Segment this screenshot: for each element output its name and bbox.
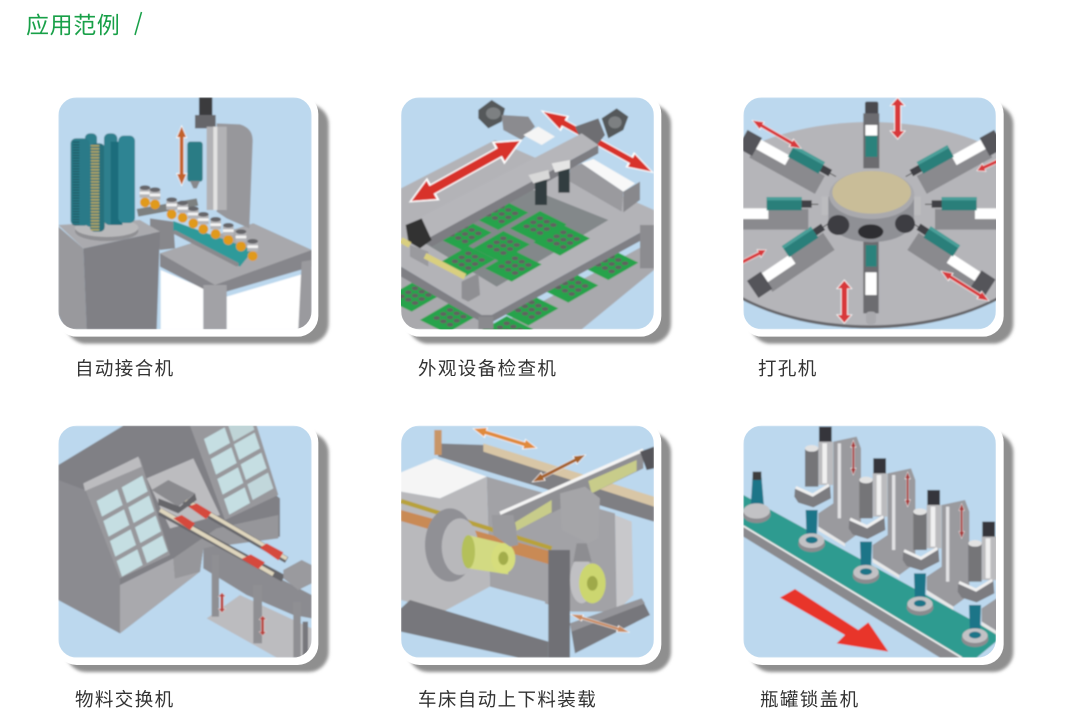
arrow: top motion (890, 97, 905, 139)
conveyor belt (743, 495, 996, 658)
arrow: vertical motion (177, 126, 187, 186)
actuator: right (924, 196, 996, 230)
capping station 3 (903, 490, 969, 615)
actuator: left (743, 196, 819, 230)
rear linear rail (434, 430, 654, 522)
arrow: lower right motion (940, 270, 990, 302)
title slash accent (135, 12, 142, 35)
arrow: conveyor direction (780, 589, 888, 652)
gantry end box, left (152, 480, 197, 513)
rear left motor and carriage (478, 100, 555, 145)
right linear stage (570, 159, 640, 212)
panel: lathe automatic loading and unloading (399, 422, 671, 672)
gantry end box, right (283, 560, 312, 590)
caption: lathe automatic loading and unloading: 车床自动上下料装载 (418, 689, 597, 710)
panel: material exchange machine (56, 414, 329, 672)
green workpiece (462, 535, 515, 574)
panel: automatic joining machine (56, 93, 329, 344)
uncapped bottle (743, 472, 771, 523)
carriage block (560, 487, 600, 543)
panel: drilling machine (743, 98, 1016, 346)
capping station 2 (849, 458, 915, 584)
tower and press column (195, 97, 253, 228)
arrow: lower left motion (743, 248, 767, 264)
left window (83, 457, 170, 578)
actuator: upper left (743, 130, 836, 194)
panel: visual inspection equipment (385, 93, 671, 347)
gripper with second workpiece (570, 543, 606, 603)
arrow: right axis motion (540, 110, 654, 174)
actuator: top (863, 102, 879, 168)
actuator: lower left (746, 223, 834, 298)
machine frame (401, 140, 654, 329)
support stand (203, 543, 312, 658)
cabinet (58, 220, 160, 329)
cross beam (492, 447, 654, 547)
lower shelf with circuit boards (401, 248, 654, 330)
arrow: bottom motion (837, 280, 852, 323)
capping station 1 (794, 427, 861, 552)
caption: automatic joining machine: 自动接合机 (75, 358, 175, 379)
arrows: vertical stand motion (218, 593, 266, 636)
right window (190, 426, 279, 520)
machine tool body (58, 426, 280, 633)
part magazine tubes (71, 133, 138, 241)
chuck (425, 508, 478, 582)
yellow guide rod and bracket (401, 240, 480, 302)
feed bar and rod (401, 501, 568, 568)
title: 应用范例 (26, 12, 120, 38)
post (548, 550, 570, 658)
arrow: lower motion (570, 611, 630, 635)
gantry beam (406, 133, 598, 267)
caption: material exchange machine: 物料交换机 (75, 689, 175, 710)
actuator: lower right (907, 223, 996, 296)
upper tray with circuit boards (425, 187, 608, 287)
inspection cameras (528, 160, 570, 205)
central hub (822, 171, 921, 242)
actuator: bottom (863, 242, 879, 324)
panel: bottle capping machine (741, 422, 1024, 672)
rear right motor and carriage (574, 108, 629, 145)
gantry rails (160, 499, 287, 578)
machine base frame (401, 598, 650, 658)
caption: bottle capping machine: 瓶罐锁盖机 (760, 689, 860, 710)
teal dispenser cylinder (187, 142, 203, 188)
circular table (743, 122, 996, 330)
caption: drilling machine: 打孔机 (758, 358, 818, 379)
table (160, 223, 312, 329)
actuator: upper right (905, 129, 996, 194)
arrow: upper left motion (752, 119, 802, 150)
arrow: left axis motion (408, 138, 523, 204)
lathe housing (401, 458, 633, 642)
conveyor with parts (137, 185, 258, 267)
caption: visual inspection equipment: 外观设备检查机 (418, 358, 557, 379)
arrow: upper right motion (976, 158, 996, 172)
arrow: rear rail motion (472, 424, 538, 453)
red motion arrows on rails (173, 503, 283, 569)
capping station 4 (958, 522, 1024, 647)
arrow: cross beam motion (530, 451, 588, 486)
